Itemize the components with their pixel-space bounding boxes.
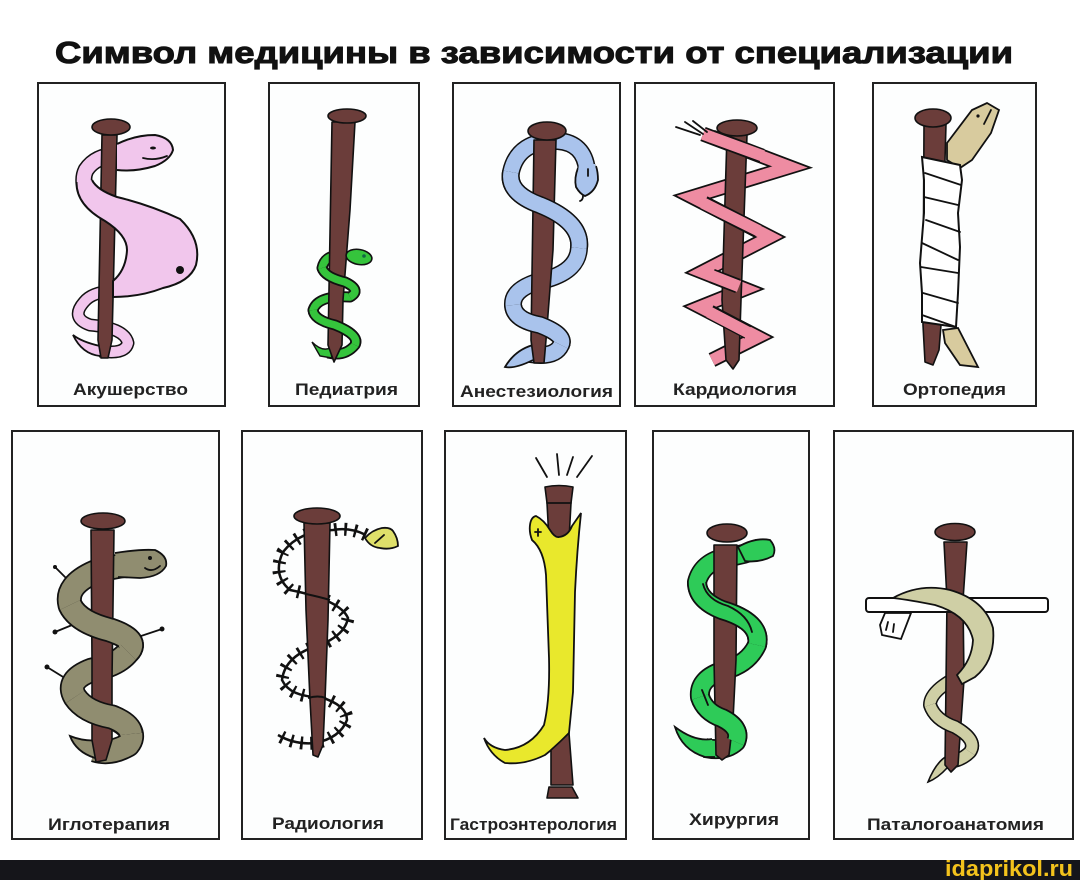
label: Кардиология <box>673 380 797 399</box>
label: Ортопедия <box>903 380 1006 399</box>
panel: pediatrics <box>269 83 419 406</box>
panel: radiology <box>242 431 422 839</box>
icon: rays above nail <box>536 454 592 477</box>
icon: nail with pale snake and crossbar <box>866 524 1048 782</box>
label: Акушерство <box>73 380 188 399</box>
icon: zigzag ECG snake on nail <box>676 120 790 369</box>
label: Паталогоанатомия <box>867 815 1044 834</box>
title: Символ медицины в зависимости от специализации <box>55 35 1013 70</box>
icon: hand <box>880 613 911 639</box>
icon: small green snake on nail <box>312 109 373 362</box>
panel: anesthesiology <box>453 83 620 406</box>
label: Педиатрия <box>295 380 398 399</box>
panel: gastroenterology <box>445 431 626 839</box>
footer bar <box>0 860 1080 880</box>
label: Хирургия <box>689 810 779 829</box>
icon: yellow flattened snake on nail <box>484 454 592 798</box>
panel: surgery <box>653 431 809 839</box>
icon: bandaged snake on nail <box>915 103 999 367</box>
label: Анестезиология <box>460 382 613 401</box>
panel: orthopedics <box>873 83 1036 406</box>
icon: olive snake with needles on nail <box>44 513 166 762</box>
icon: pregnant pink snake on nail <box>73 119 197 358</box>
icon: skeletal snake on nail <box>278 508 398 757</box>
icon: green snake with stitches on nail <box>675 524 774 760</box>
panel: pathological anatomy <box>834 431 1073 839</box>
panel: obstetrics <box>38 83 225 406</box>
icon: blue snake on nail <box>505 122 598 367</box>
label: Иглотерапия <box>48 815 170 834</box>
label: Гастроэнтерология <box>450 815 617 834</box>
panel: acupuncture <box>12 431 219 839</box>
panel: cardiology <box>635 83 834 406</box>
icon: crossbar <box>866 598 1048 612</box>
label: Радиология <box>272 814 384 833</box>
